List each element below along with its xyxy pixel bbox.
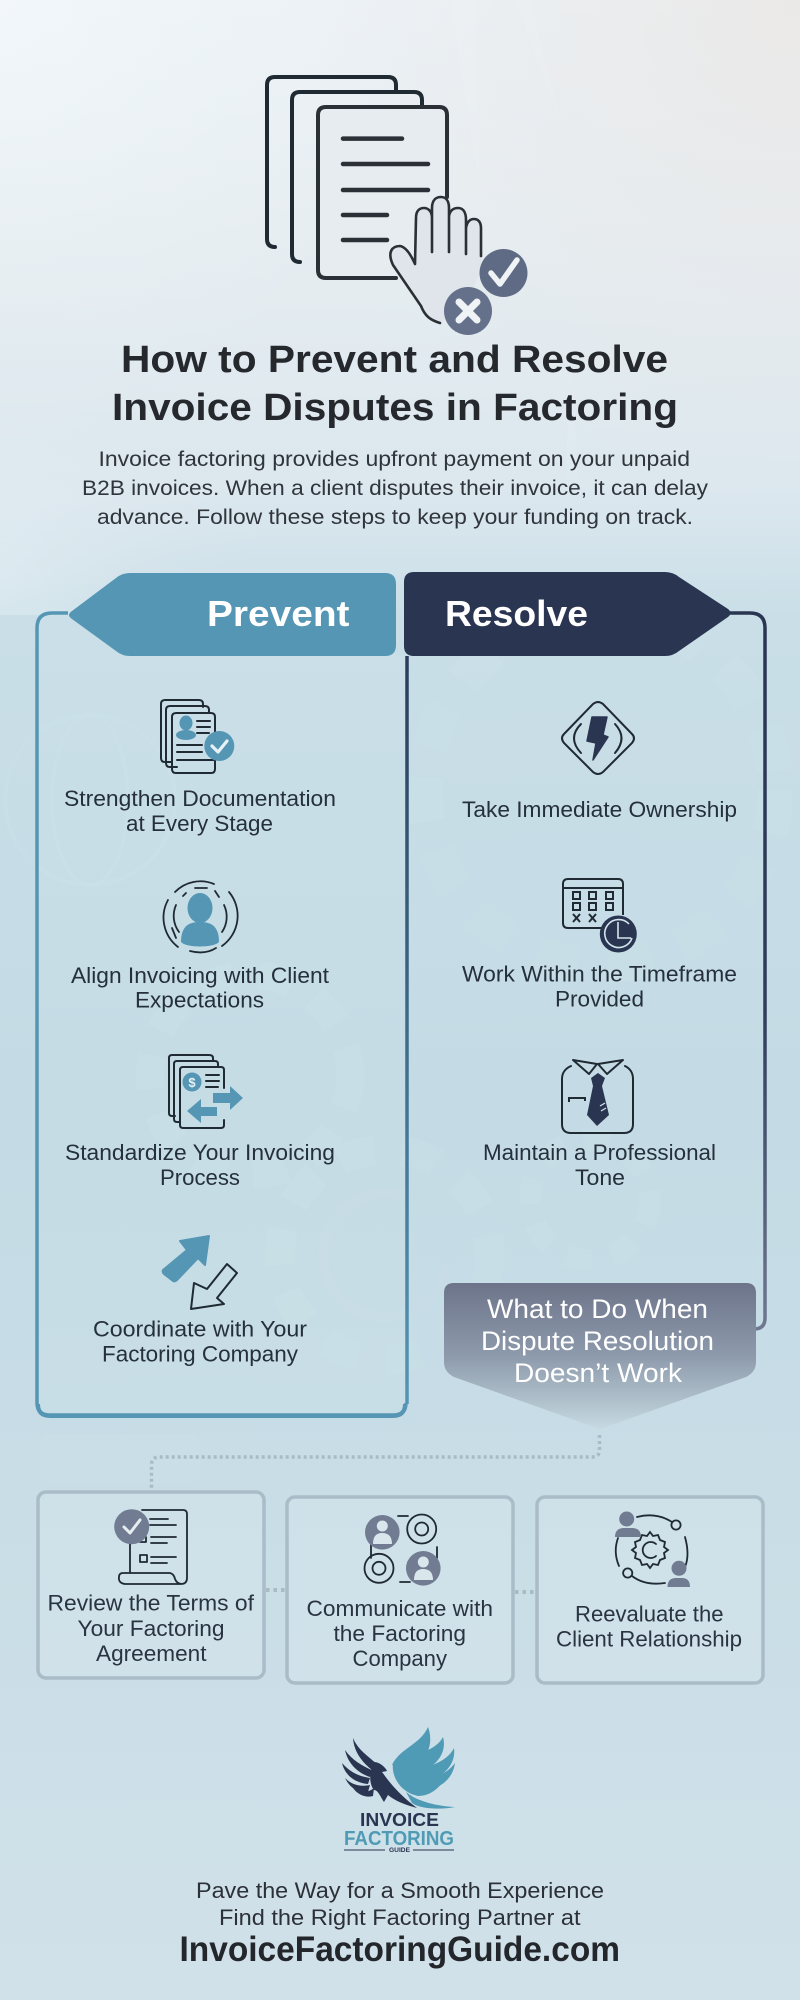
box: review the terms: Review the Terms of [48,1590,255,1616]
box: review the terms [38,1492,264,1678]
item: standardize invoicing: Process [160,1165,240,1190]
item: work within the timeframe: Provided [555,986,644,1012]
logo: navy wing and body [342,1738,417,1808]
intro text: B2B invoices. When a client disputes their invoice, it can delay [82,476,708,500]
logo: teal wing [392,1727,455,1809]
item: standardize invoicing: $ [188,1075,196,1090]
footer text: Pave the Way for a Smooth Experience [196,1878,604,1903]
item: coordinate with factoring company: Coordinate with Your [93,1316,307,1342]
logo: invoice factoring guide: INVOICE [360,1810,439,1830]
callout: what to do when dispute resolution doesn't work [444,1283,756,1428]
panel: prevent [37,573,407,1416]
intro text: advance. Follow these steps to keep your funding on track. [97,505,693,529]
box: reevaluate: Reevaluate the [575,1602,724,1626]
logo: invoice factoring guide: GUIDE [389,1847,411,1854]
item: align invoicing: Align Invoicing with Client [71,963,329,988]
icon: documents with hand and check and cross badges [267,77,528,335]
item: work within the timeframe: Work Within the Timeframe [462,962,737,986]
prevent header: Prevent [207,593,350,634]
box: communicate: Company [352,1646,447,1671]
item: coordinate with factoring company [93,1236,307,1366]
item: coordinate with factoring company: Factoring Company [102,1342,298,1366]
callout: what to do when dispute resolution doesn't work: What to Do When [487,1294,708,1324]
item: align invoicing [71,881,329,1012]
item: maintain a professional tone: Maintain a Professional [483,1140,716,1165]
box: reevaluate [537,1497,763,1683]
box: communicate: the Factoring [334,1621,466,1646]
item: work within the timeframe [462,879,737,1012]
dotted connector [152,1435,600,1490]
footer text: Find the Right Factoring Partner at [219,1905,581,1930]
box: communicate: Communicate with [306,1596,493,1621]
prevent header [69,573,396,656]
callout: what to do when dispute resolution doesn't work: Doesn’t Work [514,1358,683,1388]
intro text [82,447,708,529]
item: take immediate ownership [462,702,737,822]
intro text: Invoice factoring provides upfront payment on your unpaid [98,447,690,471]
title: How to Prevent and Resolve [121,339,668,381]
item: take immediate ownership: Take Immediate Ownership [462,797,737,822]
item: strengthen documentation [64,700,336,836]
logo: invoice factoring guide: FACTORING [344,1828,454,1850]
icon: agreement scroll [114,1509,187,1584]
box: review the terms: Agreement [96,1641,206,1666]
icon: client relationship gear [615,1512,690,1587]
item: standardize invoicing: Standardize Your Invoicing [65,1140,335,1165]
footer text: InvoiceFactoringGuide.com [180,1930,620,1969]
item: maintain a professional tone: Tone [575,1165,625,1190]
box: review the terms: Your Factoring [78,1616,224,1641]
item: standardize invoicing [65,1055,335,1190]
title [112,339,678,429]
item: strengthen documentation: at Every Stage [126,811,273,836]
connector dots between step boxes [266,1590,537,1592]
callout: what to do when dispute resolution doesn't work: Dispute Resolution [481,1326,714,1356]
icon: communication circles [364,1514,441,1586]
item: maintain a professional tone [483,1060,716,1190]
footer text [180,1878,620,1969]
title: Invoice Disputes in Factoring [112,387,678,429]
box: reevaluate: Client Relationship [556,1626,742,1652]
panel: resolve [404,572,765,1329]
resolve header: Resolve [445,593,588,634]
box: communicate [287,1497,513,1683]
item: align invoicing: Expectations [135,988,264,1012]
logo: invoice factoring guide [342,1727,455,1854]
item: strengthen documentation: Strengthen Documentation [64,786,336,811]
resolve header [404,572,730,656]
